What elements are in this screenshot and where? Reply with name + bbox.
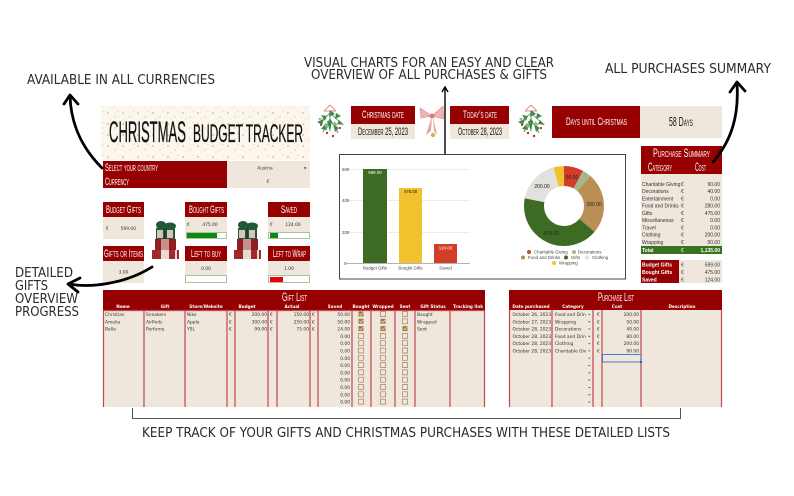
- today's date: October 28, 2023: [458, 126, 502, 138]
- table: purchase list: October 28, 2023: [512, 348, 551, 354]
- country selector: Austria: [257, 166, 273, 172]
- bracket: [132, 408, 680, 418]
- panel: purchase summary: 0.00: [710, 226, 720, 232]
- days until christmas: 58 Days: [669, 114, 693, 129]
- table: purchase list: Purchase List: [598, 290, 634, 304]
- panel: purchase summary: 40.00: [707, 189, 720, 195]
- table: gift list: 50.00: [337, 312, 350, 318]
- table: gift list: €: [312, 312, 315, 318]
- panel: purchase summary: Wrapping: [642, 240, 664, 246]
- table: gift list: Store/Website: [189, 304, 223, 309]
- table: gift list: 0.00: [340, 341, 350, 347]
- panel: purchase summary: Charitable Giving: [642, 182, 681, 188]
- panel: purchase summary: €: [681, 240, 684, 246]
- table: gift list: Bought: [417, 312, 433, 318]
- chart legend: Charitable Giving: [534, 250, 568, 254]
- country selector: Currency: [105, 176, 129, 188]
- table: gift list: 150.00: [294, 312, 309, 318]
- table: gift list: €: [229, 327, 232, 333]
- table: gift list: Bella: [105, 327, 116, 333]
- table: gift list: €: [229, 319, 232, 325]
- table: purchase list: [509, 290, 722, 407]
- table: gift list: Budget: [238, 304, 256, 309]
- chart legend: Decorations: [578, 250, 602, 254]
- kpi: budget gifts: Budget Gifts: [106, 204, 141, 216]
- table: purchase list: Food and Drin: [555, 334, 586, 340]
- kpi: bought gifts: €: [187, 222, 190, 228]
- kpi: left to buy: Left to buy: [191, 248, 221, 260]
- table: gift list: 300.00: [252, 319, 267, 325]
- table: gift list: Amelia: [105, 319, 120, 325]
- label: detailed gifts overview progress: [15, 266, 79, 320]
- days until christmas: Days until Christmas: [566, 116, 627, 128]
- kpi: gifts or items: [103, 246, 144, 283]
- table: purchase list: 80.00: [626, 334, 639, 340]
- chart legend: Clothing: [592, 255, 609, 260]
- table: gift list: Gift Status: [420, 304, 446, 309]
- table: gift list: AirPods: [146, 319, 163, 325]
- table: gift list: Gift List: [282, 290, 307, 304]
- bar chart: 475.00: [404, 189, 418, 194]
- checkboxes: [358, 312, 408, 404]
- table: gift list: €: [312, 327, 315, 333]
- chart legend: Wrapping: [559, 260, 578, 266]
- chart legend: Gifts: [571, 255, 581, 260]
- panel: purchase summary: €: [681, 218, 684, 224]
- christmas date: December 25, 2023: [358, 126, 408, 138]
- bar chart: 400: [342, 198, 350, 203]
- label: detailed gifts overview progress: OVERVIEW: [15, 292, 78, 307]
- panel: purchase summary: 50.00: [707, 240, 720, 246]
- table: purchase list: 200.00: [624, 312, 639, 318]
- panel: charts: [340, 154, 626, 279]
- table: gift list: Wrapped: [372, 304, 394, 309]
- table: gift list: Perfume: [146, 327, 165, 333]
- table: purchase list: Charitable Giv: [555, 348, 587, 354]
- chart legend: [521, 250, 609, 266]
- table: gift list: Name: [116, 304, 130, 309]
- table: purchase list: Food and Drin: [555, 312, 586, 318]
- panel: summary totals: €: [681, 270, 684, 276]
- panel: summary totals: 124.00: [705, 278, 720, 284]
- table: purchase list: Decorations: [555, 327, 582, 333]
- panel: summary totals: 599.00: [705, 262, 720, 268]
- panel: purchase summary: Cost: [695, 160, 706, 174]
- table: gift list: Apple: [187, 319, 200, 325]
- panel: purchase summary: Miscellaneous: [642, 218, 674, 224]
- kpi: left to buy: 0.00: [201, 266, 211, 272]
- panel: purchase summary: €: [681, 189, 684, 195]
- table: purchase list: 40.00: [626, 327, 639, 333]
- table: purchase list: October 28, 2023: [512, 334, 551, 340]
- table: gift list: 24.00: [337, 327, 350, 333]
- panel: purchase summary: Purchase Summary: [653, 146, 710, 160]
- table: gift list: Christian: [105, 312, 125, 318]
- table: gift list: €: [270, 327, 273, 333]
- bar chart: 0: [344, 261, 347, 266]
- panel: summary totals: Saved: [642, 278, 657, 284]
- kpi: bought gifts: 475.00: [202, 222, 218, 228]
- panel: purchase summary: 280.00: [705, 204, 720, 210]
- panel: purchase summary: €: [681, 182, 684, 188]
- panel: summary totals: €: [681, 278, 684, 284]
- table: gift list: 0.00: [340, 400, 350, 406]
- christmas date: [351, 106, 415, 139]
- kpi: bought gifts: Bought Gifts: [189, 204, 224, 216]
- donut chart: 280.00: [586, 202, 602, 208]
- panel: purchase summary: €: [681, 204, 684, 210]
- bar chart: 200: [342, 230, 350, 235]
- table: purchase list: €: [597, 334, 600, 340]
- label: visual charts: [304, 56, 554, 83]
- panel: purchase summary: Food and Drinks: [642, 204, 679, 210]
- table: gift list: Bought: [352, 304, 370, 309]
- table: gift list: 0.00: [340, 363, 350, 369]
- kpi: gifts or items: 3.00: [119, 270, 129, 276]
- table: gift list: Sent: [400, 304, 410, 309]
- table: purchase list: €: [597, 319, 600, 325]
- kpi: left to wrap: Left to Wrap: [273, 248, 306, 260]
- table: gift list: 200.00: [252, 312, 267, 318]
- panel: purchase summary: 200.00: [705, 233, 720, 239]
- bar chart: [342, 167, 470, 270]
- panel: purchase summary: 0.00: [710, 196, 720, 202]
- table: purchase list: October 26, 2023: [512, 312, 551, 318]
- country selector: Select your country: [105, 162, 158, 174]
- panel: purchase summary: 0.00: [710, 218, 720, 224]
- label: detailed gifts overview progress: GIFTS: [15, 279, 48, 294]
- panel: purchase summary: Gifts: [642, 211, 653, 217]
- panel: purchase summary: €: [681, 226, 684, 232]
- title banner: [101, 106, 310, 160]
- today's date: [450, 106, 509, 139]
- label: detailed gifts overview progress: DETAILED: [15, 266, 73, 281]
- icon: gift stack: [234, 221, 261, 259]
- table: gift list: €: [270, 312, 273, 318]
- selected cell: [602, 354, 642, 363]
- total row: €: [681, 248, 684, 254]
- table: purchase list: Category: [562, 304, 584, 309]
- table: gift list: 250.00: [294, 319, 309, 325]
- panel: purchase summary: Clothing: [642, 233, 661, 239]
- icon: bow: [420, 106, 444, 137]
- christmas date: Christmas date: [362, 109, 404, 121]
- today's date: Today's date: [463, 109, 497, 121]
- bar chart: Budget Gifts: [363, 266, 388, 270]
- kpi: saved: Saved: [281, 204, 297, 216]
- table: gift list: Sent: [417, 327, 427, 333]
- table: gift list: €: [270, 319, 273, 325]
- table: purchase list: Description: [668, 304, 696, 309]
- icon: mistletoe: [317, 105, 344, 137]
- table: purchase list: €: [597, 348, 600, 354]
- donut chart: 200.00: [534, 184, 550, 190]
- total row: [641, 246, 722, 254]
- label: available in all currencies: AVAILABLE IN ALL CURRENCIES: [27, 73, 215, 88]
- kpi: saved: [268, 202, 310, 239]
- icon: gift stack: [152, 221, 179, 259]
- table: purchase list: Cost: [612, 304, 622, 309]
- bar chart: 599.00: [368, 170, 382, 175]
- table: gift list: 0.00: [340, 334, 350, 340]
- kpi: left to wrap: 1.00: [284, 266, 294, 272]
- kpi: bought gifts: [185, 202, 227, 239]
- donut chart: [534, 175, 602, 237]
- panel: purchase summary: €: [681, 211, 684, 217]
- kpi: saved: €: [270, 222, 273, 228]
- donut chart: 90.00: [566, 175, 578, 181]
- bar chart: Saved: [439, 266, 452, 270]
- bar chart: 124.00: [439, 246, 453, 250]
- table: gift list: Saved: [328, 304, 342, 309]
- panel: purchase summary: €: [681, 233, 684, 239]
- panel: purchase summary: 90.00: [707, 182, 720, 188]
- table: gift list: 75.00: [296, 327, 309, 333]
- label: keep track: KEEP TRACK OF YOUR GIFTS AND CHRISTMAS PURCHASES WITH THESE DETAILED LISTS: [142, 426, 670, 441]
- donut chart: 475.00: [543, 231, 559, 237]
- title banner: CHRISTMAS: [109, 116, 186, 149]
- country selector: €: [267, 179, 270, 185]
- table: gift list: Gift: [161, 304, 169, 309]
- panel: summary totals: [641, 260, 722, 284]
- panel: summary totals: Budget Gifts: [642, 262, 672, 268]
- table: purchase list: €: [597, 312, 600, 318]
- kpi: left to buy: [185, 246, 227, 283]
- table: purchase list: Wrapping: [555, 319, 576, 325]
- table: purchase list: Clothing: [555, 341, 573, 347]
- country selector: [103, 161, 310, 188]
- panel: summary totals: 475.00: [705, 270, 720, 276]
- table: gift list: [103, 290, 485, 407]
- table: gift list: Wrapped: [417, 319, 437, 325]
- table: gift list: 0.00: [340, 370, 350, 376]
- label: visual charts: OVERVIEW OF ALL PURCHASES & GIFTS: [311, 68, 547, 83]
- days until christmas: [552, 106, 722, 138]
- table: purchase list: 50.00: [626, 319, 639, 325]
- label: detailed gifts overview progress: PROGRESS: [15, 305, 79, 320]
- table: gift list: Sneakers: [146, 312, 167, 318]
- panel: purchase summary: Travel: [642, 226, 656, 232]
- panel: purchase summary: Entertainment: [642, 196, 674, 202]
- chart legend: Food and Drinks: [528, 255, 561, 260]
- panel: purchase summary: 475.00: [705, 211, 720, 217]
- panel: purchase summary: Category: [648, 160, 672, 174]
- label: all purchases summary: ALL PURCHASES SUMMARY: [605, 62, 771, 77]
- table: purchase list: €: [597, 341, 600, 347]
- arrow: currencies: [64, 95, 102, 168]
- panel: summary totals: €: [681, 262, 684, 268]
- table: gift list: Nike: [187, 312, 197, 318]
- kpi: left to wrap: [268, 246, 310, 283]
- panel: purchase summary: Decorations: [642, 189, 669, 195]
- table: purchase list: 90.00: [626, 348, 639, 354]
- table: gift list: 0.00: [340, 378, 350, 384]
- table: gift list: Tracking link: [453, 304, 483, 309]
- bar chart: Bought Gifts: [398, 266, 423, 270]
- label: visual charts: VISUAL CHARTS FOR AN EASY AND CLEAR: [304, 56, 554, 71]
- arrow: gifts overview: [68, 267, 152, 292]
- table: purchase list: €: [597, 327, 600, 333]
- table: gift list: 50.00: [337, 319, 350, 325]
- table: gift list: €: [312, 319, 315, 325]
- table: gift list: 0.00: [340, 348, 350, 354]
- table: purchase list: Date purchased: [512, 304, 550, 309]
- arrow: purchases summary: [713, 82, 745, 162]
- table: gift list: 99.00: [254, 327, 267, 333]
- country selector: ▾: [304, 166, 307, 172]
- panel: summary totals: Bought Gifts: [642, 270, 672, 276]
- table: gift list: Actual: [285, 304, 300, 309]
- table: gift list: 0.00: [340, 356, 350, 362]
- kpi: budget gifts: [103, 202, 144, 239]
- icon: mistletoe: [518, 105, 545, 137]
- table: gift list: YSL: [186, 327, 195, 333]
- table: purchase list: October 28, 2023: [512, 327, 551, 333]
- total row: 1,135.00: [701, 248, 720, 254]
- total row: Total: [642, 248, 654, 254]
- table: purchase list: 200.00: [624, 341, 639, 347]
- kpi: saved: 124.00: [285, 222, 301, 228]
- table: purchase list: October 28, 2023: [512, 341, 551, 347]
- kpi: gifts or items: Gifts or Items: [104, 248, 143, 260]
- table: purchase list: October 27, 2023: [512, 319, 551, 325]
- arrow: charts: [442, 87, 448, 155]
- table: gift list: €: [229, 312, 232, 318]
- kpi: budget gifts: €: [106, 226, 109, 232]
- table: gift list: 0.00: [340, 385, 350, 391]
- panel: purchase summary: €: [681, 196, 684, 202]
- panel: purchase summary: [641, 146, 722, 254]
- table: gift list: 0.00: [340, 392, 350, 398]
- title banner: BUDGET TRACKER: [193, 120, 303, 148]
- kpi: budget gifts: 599.00: [121, 226, 136, 232]
- bar chart: 600: [342, 167, 350, 172]
